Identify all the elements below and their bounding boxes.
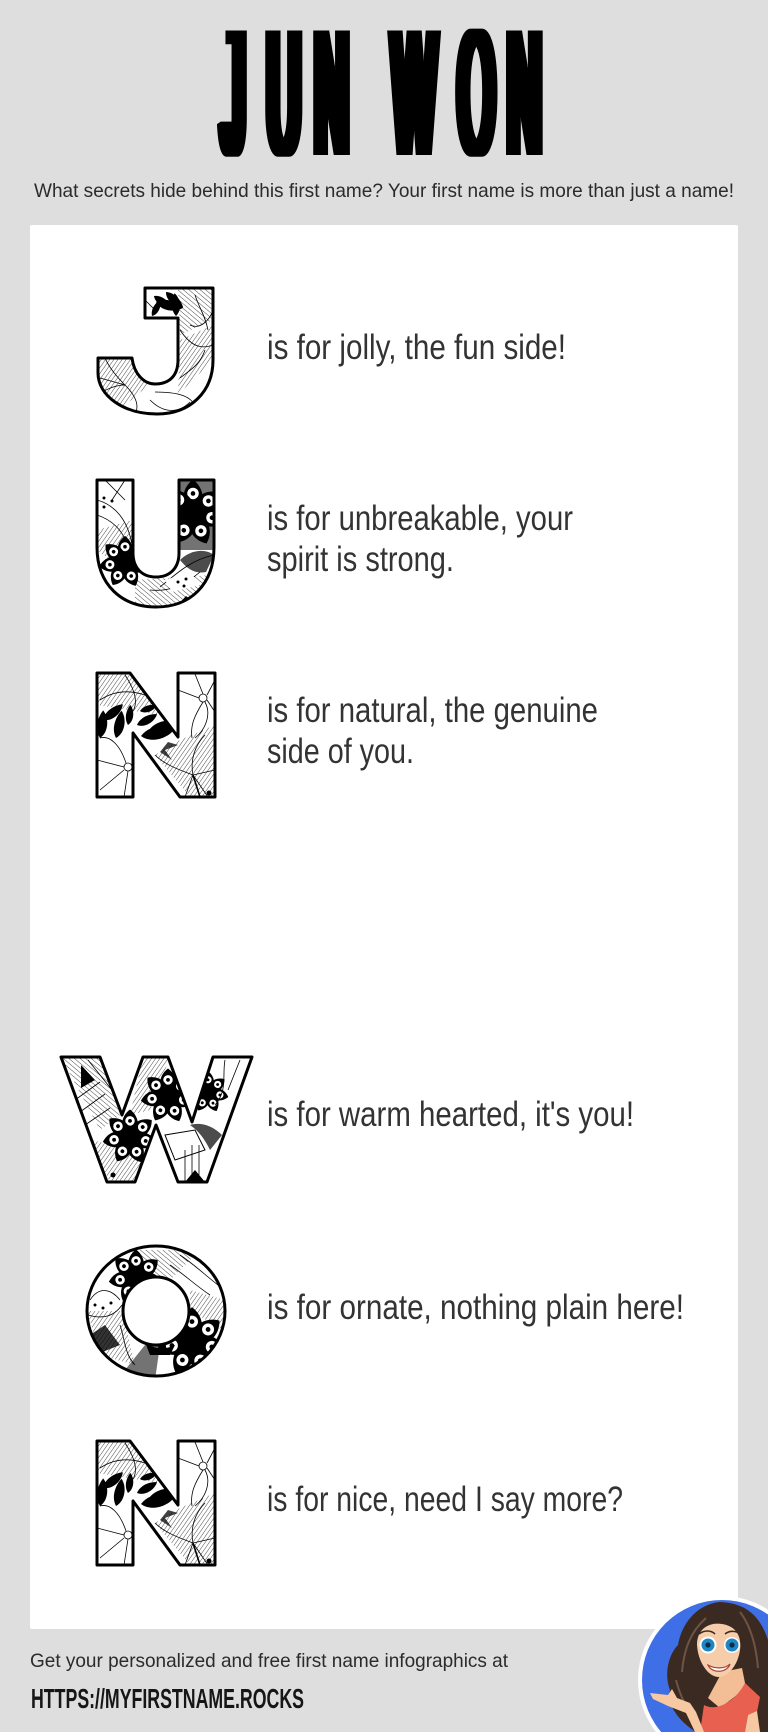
panel: white card [30,225,738,1629]
icon: letter O [87,1246,228,1380]
footer text: Get your personalized and free first name infographics at [30,1650,509,1672]
text: J line: is for jolly, the fun side! [267,328,566,367]
text: O line: is for ornate, nothing plain here! [267,1288,684,1327]
icon: letter J [98,288,213,414]
avatar: woman in circle [638,1596,768,1732]
icon: letter W [61,1057,252,1182]
text: U lines: spirit is strong. [267,540,454,579]
text: U lines: is for unbreakable, your [267,499,573,538]
text: U lines [267,499,573,579]
icon: letter N [91,673,215,797]
subtitle: What secrets hide behind this first name? Your first name is more than just a name! [34,180,734,202]
text: N second line: is for nice, need I say more? [267,1480,623,1519]
footer link: HTTPS://MYFIRSTNAME.ROCKS [31,1683,304,1714]
row: W [61,1057,634,1182]
row: J [98,288,566,414]
text: N lines: side of you. [267,732,414,771]
icon: letter N second [91,1441,215,1565]
row: N first [91,673,598,797]
row: U [97,480,573,607]
row: O [87,1246,684,1380]
text: W line: is for warm hearted, it's you! [267,1095,634,1134]
text: N lines [267,691,598,771]
row: N second [91,1441,623,1565]
icon: letter U [97,480,228,607]
text: N lines: is for natural, the genuine [267,691,598,730]
